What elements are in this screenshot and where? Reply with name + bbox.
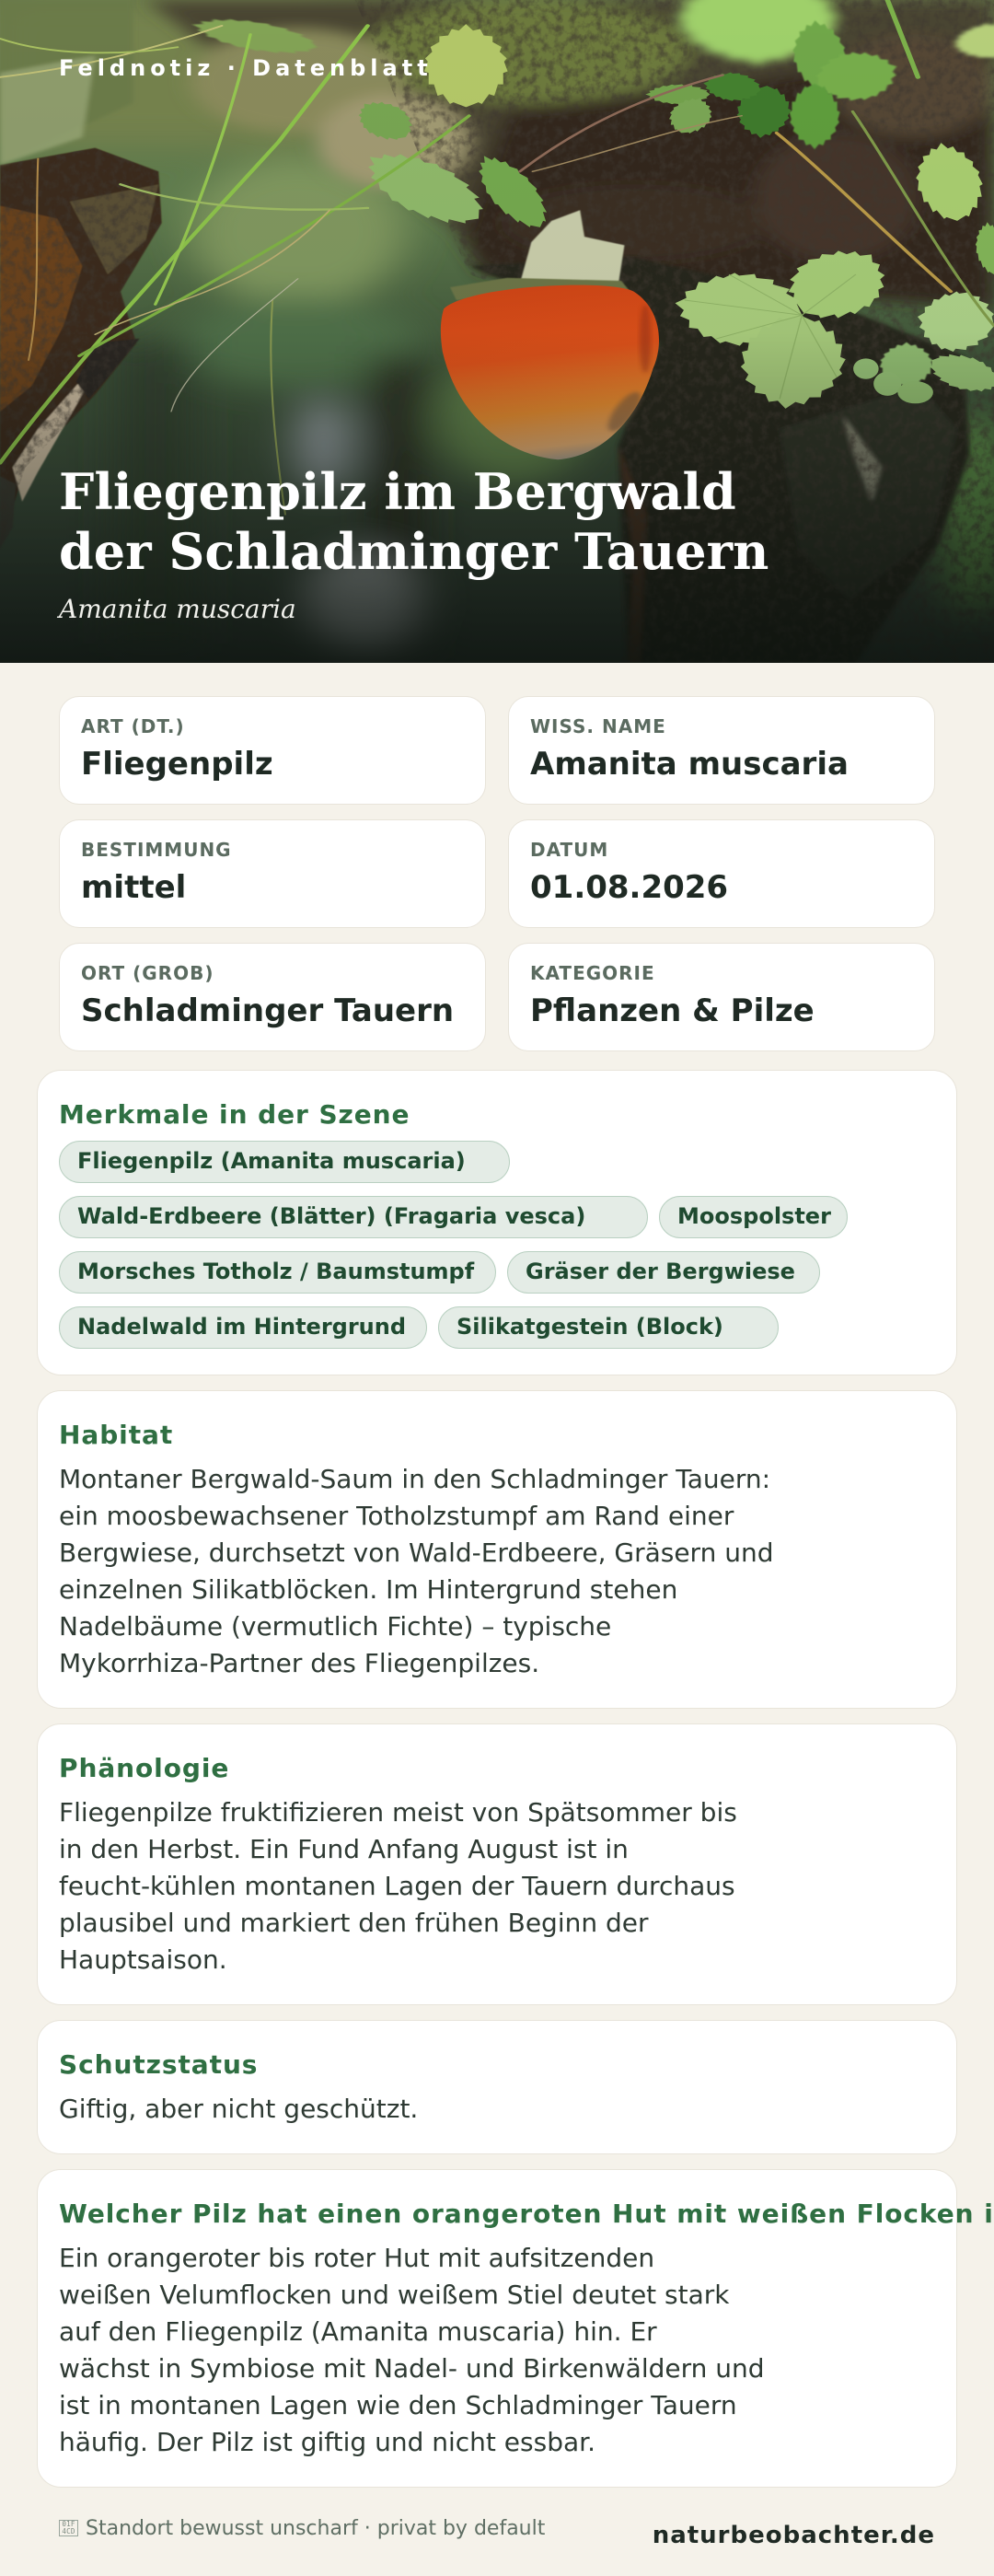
soil texture — [355, 0, 994, 663]
text: Antwort: häufig. Der Pilz ist giftig und nicht essbar. — [59, 2427, 595, 2457]
card: Art: ART (DT.) — [81, 715, 185, 737]
card: Art — [59, 696, 486, 805]
panel: Habitat — [37, 1390, 957, 1709]
card: Kategorie — [508, 943, 935, 1051]
tree stump — [469, 257, 970, 663]
text: Antwort: wächst in Symbiose mit Nadel- und Birkenwäldern und — [59, 2353, 765, 2384]
footer note: Standort bewusst unscharf · privat by default — [86, 2517, 545, 2540]
title — [59, 462, 769, 581]
heading: Phänologie: Phänologie — [59, 1753, 229, 1783]
chip list: Moospolster — [677, 1203, 831, 1229]
card: Wiss. Name: WISS. NAME — [530, 715, 666, 737]
chip list: Silikatgestein (Block) — [457, 1314, 723, 1340]
card: Kategorie: Pflanzen & Pilze — [530, 992, 815, 1029]
text: Habitat: Montaner Bergwald-Saum in den Schladminger Tauern: — [59, 1464, 770, 1494]
forest blur — [0, 0, 994, 656]
text: Habitat: Bergwiese, durchsetzt von Wald-Erdbeere, Gräsern und — [59, 1537, 773, 1568]
card: Kategorie: KATEGORIE — [530, 962, 655, 984]
text: Phänologie: Fliegenpilze fruktifizieren meist von Spätsommer bis — [59, 1797, 737, 1828]
chip list — [59, 1141, 848, 1349]
text: Phänologie: in den Herbst. Ein Fund Anfang August ist in — [59, 1834, 629, 1864]
panel: Phänologie — [37, 1723, 957, 2005]
heading: Habitat: Habitat — [59, 1420, 173, 1450]
scientific name: Amanita muscaria — [59, 594, 296, 624]
card: Datum: DATUM — [530, 839, 608, 861]
text: Habitat: ein moosbewachsener Totholzstumpf am Rand einer — [59, 1501, 734, 1531]
title: der Schladminger Tauern — [59, 522, 769, 581]
card: Art: Fliegenpilz — [81, 746, 273, 783]
chip list: Fliegenpilz (Amanita muscaria) — [77, 1148, 466, 1174]
text: Antwort: Ein orangeroter bis roter Hut mit aufsitzenden — [59, 2243, 654, 2273]
text: Phänologie: feucht-kühlen montanen Lagen der Tauern durchaus — [59, 1871, 735, 1901]
eyebrow: Feldnotiz · Datenblatt — [59, 55, 433, 81]
mushroom — [441, 210, 659, 459]
soil and moss — [145, 0, 994, 308]
chip list: Morsches Totholz / Baumstumpf — [77, 1259, 474, 1284]
text: Antwort: auf den Fliegenpilz (Amanita muscaria) hin. Er — [59, 2316, 657, 2347]
chip list: Wald-Erdbeere (Blätter) (Fragaria vesca) — [77, 1203, 585, 1229]
upper left moss — [0, 0, 133, 165]
panel: Merkmale — [37, 1070, 957, 1375]
heading: Schutzstatus: Schutzstatus — [59, 2049, 258, 2080]
card: Bestimmung: mittel — [81, 869, 186, 906]
card: Wiss. Name: Amanita muscaria — [530, 746, 849, 783]
card: Bestimmung — [59, 819, 486, 928]
grass blades — [0, 0, 994, 515]
bottom dark gradient — [0, 0, 994, 663]
icon: missing glyph box: 01F — [62, 2520, 75, 2528]
left log — [0, 148, 162, 549]
text: Habitat: Nadelbäume (vermutlich Fichte) – typische — [59, 1611, 611, 1642]
text: Phänologie: plausibel und markiert den frühen Beginn der — [59, 1908, 648, 1938]
text: Antwort: ist in montanen Lagen wie den Schladminger Tauern — [59, 2390, 737, 2420]
card: Ort — [59, 943, 486, 1051]
card: Ort: ORT (GROB) — [81, 962, 214, 984]
text: Habitat: einzelnen Silikatblöcken. Im Hintergrund stehen — [59, 1574, 677, 1605]
text: Antwort — [59, 2243, 765, 2457]
strawberry leaves — [187, 0, 994, 412]
text: Habitat — [59, 1464, 773, 1678]
icon: missing glyph box: 4CD — [62, 2527, 75, 2535]
card: Bestimmung: BESTIMMUNG — [81, 839, 232, 861]
footer brand: naturbeobachter.de — [653, 2522, 935, 2549]
text: Phänologie — [59, 1797, 737, 1975]
icon: missing glyph box — [59, 2520, 78, 2536]
card: Datum — [508, 819, 935, 928]
card: Ort: Schladminger Tauern — [81, 992, 454, 1029]
card: Datum: 01.08.2026 — [530, 869, 728, 906]
text: Schutzstatus: Giftig, aber nicht geschützt. — [59, 2094, 418, 2124]
hero photo with title — [0, 0, 994, 663]
chip list: Nadelwald im Hintergrund — [77, 1314, 406, 1340]
photo: mushroom on mossy stump — [0, 0, 994, 663]
chip list: Gräser der Bergwiese — [526, 1259, 795, 1284]
heading: Merkmale: Merkmale in der Szene — [59, 1099, 410, 1130]
title: Fliegenpilz im Bergwald — [59, 462, 736, 521]
text: Antwort: weißen Velumflocken und weißem Stiel deutet stark — [59, 2280, 730, 2310]
panel: Schutzstatus — [37, 2020, 957, 2154]
text: Phänologie: Hauptsaison. — [59, 1944, 227, 1975]
panel: Frage — [37, 2169, 957, 2488]
card: Wiss. Name — [508, 696, 935, 805]
text: Habitat: Mykorrhiza-Partner des Fliegenpilzes. — [59, 1648, 539, 1678]
